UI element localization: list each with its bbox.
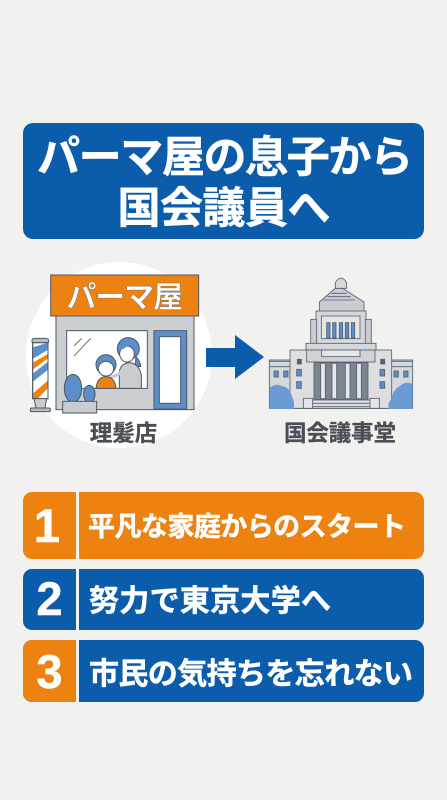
- number 2: 2: [36, 572, 63, 625]
- label: barber shop: 理髪店: [90, 421, 157, 446]
- list item 1: [23, 492, 424, 559]
- shop body: [56, 315, 194, 410]
- shop window: [67, 331, 147, 388]
- white circle behind barber shop: [26, 262, 212, 448]
- item 3 text: 市民の気持ちを忘れない: [89, 658, 413, 691]
- number 3: 3: [36, 645, 63, 698]
- door: [154, 331, 187, 409]
- boy figure: [96, 355, 116, 388]
- list item 3: [23, 640, 424, 702]
- side wings: [269, 360, 413, 408]
- title line 1: パーマ屋の息子から: [37, 134, 413, 182]
- barber pole: [30, 338, 50, 412]
- entrance steps: [303, 398, 379, 408]
- illustration: barber shop: [30, 275, 199, 413]
- title panel: [23, 123, 424, 239]
- item 2 text: 努力で東京大学へ: [89, 585, 331, 618]
- right shrub: [388, 383, 413, 409]
- arrow: [206, 335, 264, 379]
- number 1: 1: [34, 499, 60, 552]
- label: national diet building: 国会議事堂: [284, 421, 396, 446]
- main block: [290, 350, 392, 408]
- illustration: national diet building: [269, 278, 413, 409]
- sign board: パーマ屋: [66, 281, 183, 314]
- title line 2: 国会議員へ: [118, 185, 330, 233]
- tower: [306, 278, 376, 350]
- window glare: [74, 338, 91, 356]
- planter: [63, 374, 97, 413]
- list item 2: [23, 569, 424, 630]
- item 1 text: 平凡な家庭からのスタート: [88, 512, 406, 542]
- woman figure: [110, 338, 141, 388]
- left shrub: [269, 385, 294, 409]
- sign board: [51, 275, 199, 316]
